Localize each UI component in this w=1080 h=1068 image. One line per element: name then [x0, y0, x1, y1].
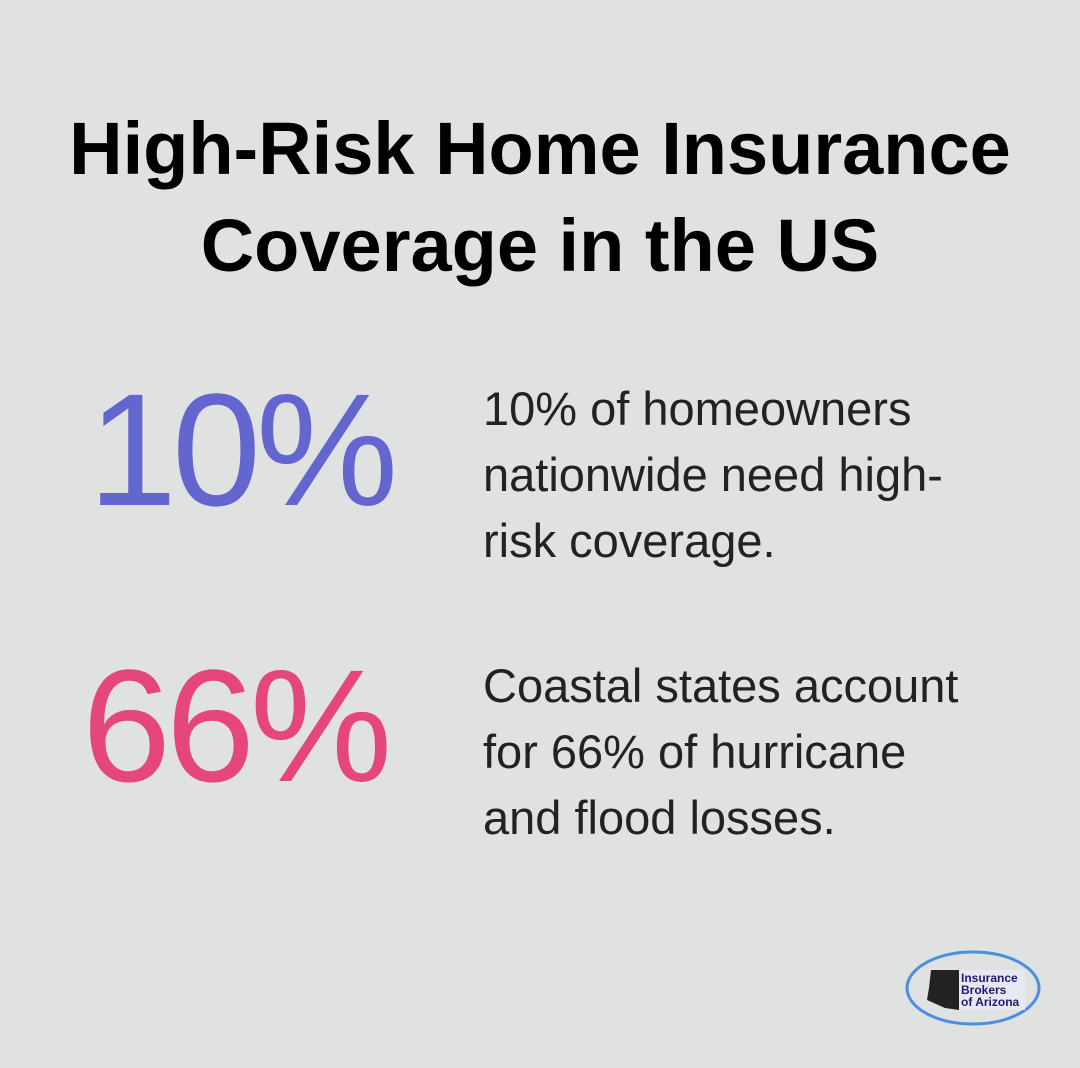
text: 10% description — [483, 382, 943, 567]
title: High-Risk Home Insurance — [69, 107, 1011, 190]
text: 10% description: nationwide need high- — [483, 448, 943, 501]
logo: of Arizona — [961, 995, 1020, 1009]
text: 10% description: risk coverage. — [483, 514, 776, 567]
logo: Brokers — [961, 983, 1007, 997]
stat: 66%: 66% — [82, 636, 387, 815]
logo: Insurance — [961, 971, 1018, 985]
stat: 10%: 10% — [88, 360, 393, 539]
text: 66% description: and flood losses. — [483, 791, 836, 844]
text: 66% description — [483, 659, 958, 844]
logo — [906, 950, 1040, 1026]
title: Coverage in the US — [201, 204, 879, 287]
text: 66% description: for 66% of hurricane — [483, 725, 906, 778]
title — [69, 107, 1011, 287]
text: 10% description: 10% of homeowners — [483, 382, 911, 435]
text: 66% description: Coastal states account — [483, 659, 958, 712]
